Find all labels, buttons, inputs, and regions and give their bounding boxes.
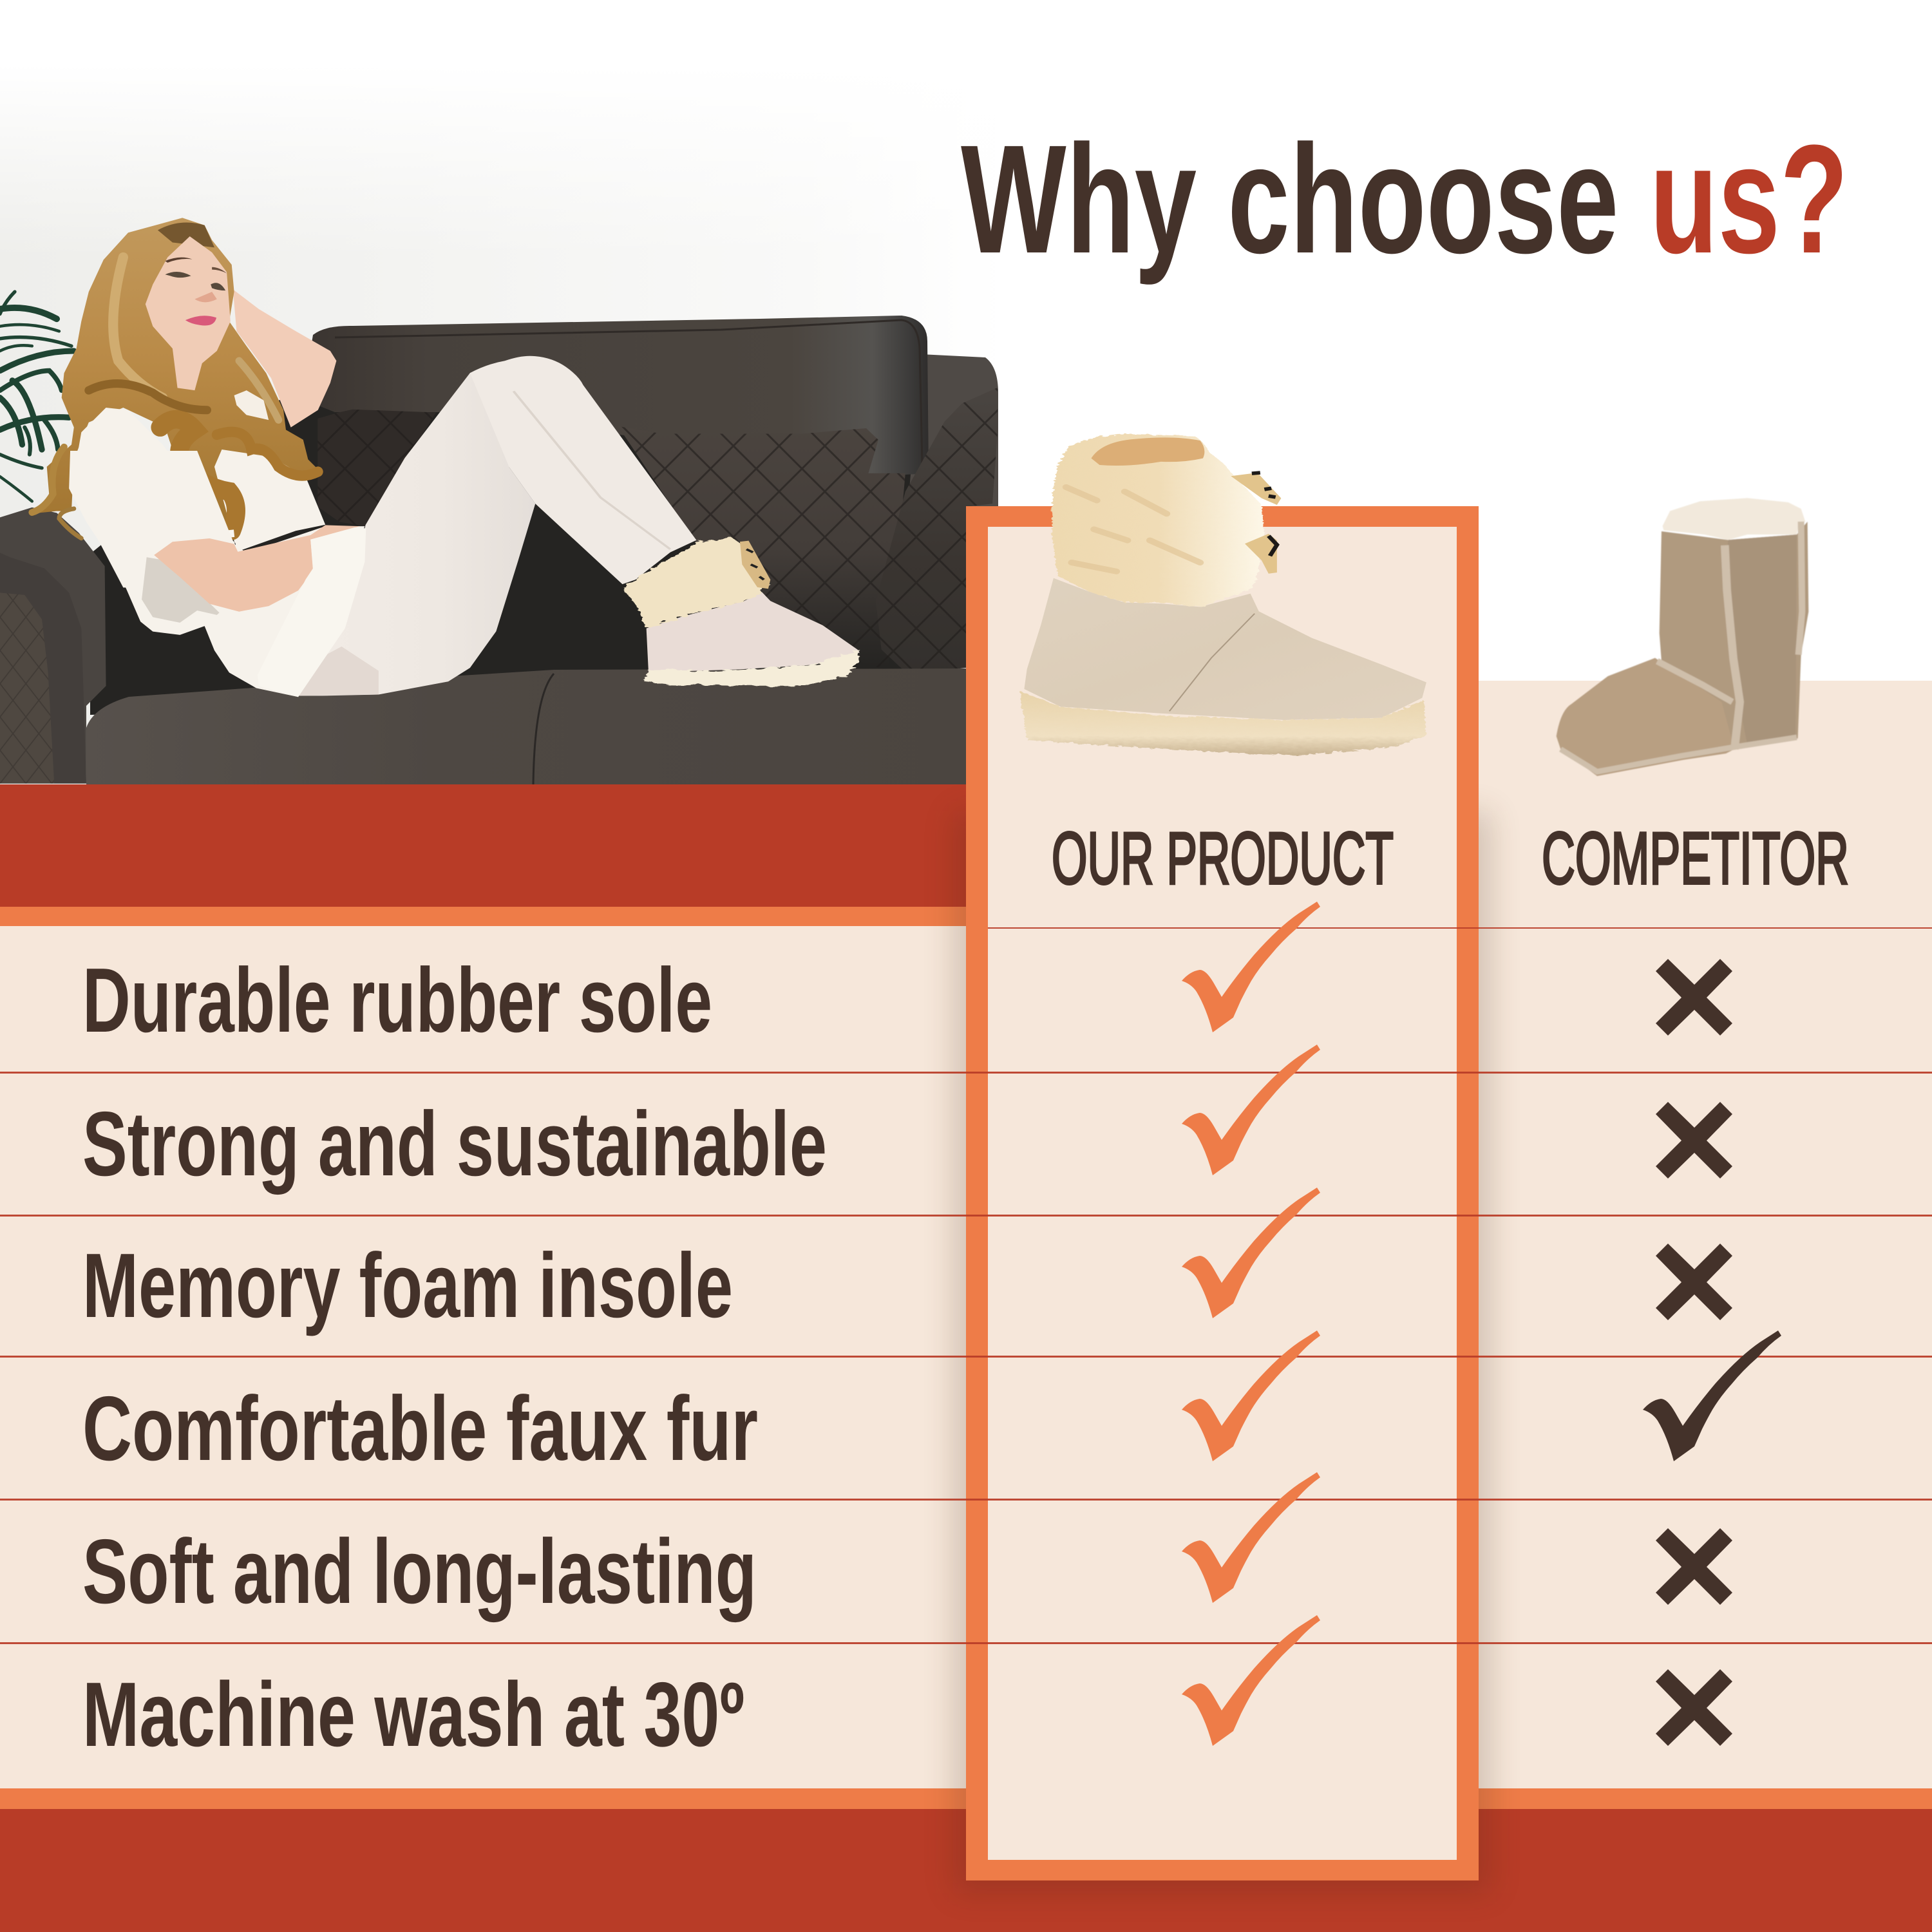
shirt lower [69,451,365,697]
seam [1170,614,1255,711]
peach table background left [0,926,966,1788]
boot body [1024,578,1426,720]
title: Why choose us? [961,113,1848,285]
shirt shoulder piece [234,390,269,420]
feature: soft and long-lasting: Soft and long-lasting [82,1520,757,1623]
raised arm [233,289,336,428]
back cushion piping [335,320,922,464]
right armrest [902,354,998,580]
right pillow [876,388,998,674]
left armrest [0,507,106,784]
face details [165,258,227,326]
trouser side seam [513,391,670,549]
feature: comfortable faux fur: Comfortable faux fur [82,1378,758,1480]
boot on foot [622,537,860,686]
face and neck [146,236,231,390]
product image: our boot [1020,434,1426,755]
hair curls [32,258,318,538]
feature: strong and sustainable: Strong and sustainable [82,1093,827,1195]
icons: competitor marks [1643,959,1781,1746]
left pillow [317,410,436,526]
plant [0,292,74,501]
orange header strip [0,907,966,926]
wall background [0,0,1005,784]
fleece rim [1663,498,1805,540]
trousers upper leg [296,363,535,696]
stitching [1560,522,1802,772]
shirt flap [258,527,366,697]
fur sole [1020,691,1426,755]
boot opening [1091,437,1204,466]
fur cuff [1052,434,1264,607]
hair mass [32,218,321,536]
back cushion [303,316,929,477]
center pillow [618,426,905,671]
toggles [1231,473,1281,574]
feature: durable rubber sole: Durable rubber sole [82,949,712,1052]
red header band [0,784,966,907]
sleeve lace [140,514,234,543]
peach table background right [1479,681,1932,1788]
red footer band [0,1809,1932,1932]
shirt upper [71,408,325,587]
trousers lower leg [470,356,696,584]
woman [32,218,696,697]
hair crown shadow [158,222,214,247]
orange footer strip [0,1788,1932,1809]
sofa back and seat [90,316,998,715]
seat cushion [86,668,966,784]
panel: our product column [966,506,1479,1880]
row divider lines [0,927,1932,1644]
seat seam [533,674,554,784]
feature: memory foam insole: Memory foam insole [82,1235,733,1337]
fur streaks [1066,487,1200,571]
product image: competitor boot [1557,498,1808,776]
panel shadow [953,811,1492,1893]
photo: woman resting on sofa wearing boots [0,0,1005,784]
dark cavity [90,386,914,715]
column heading: our product: OUR PRODUCT [1052,818,1394,900]
inner sleeve [142,557,220,623]
boot shaft [1660,522,1808,752]
forearm [154,525,360,612]
shaft right side [1726,535,1797,745]
icons: our product check marks [1182,902,1320,1746]
feature: machine wash at 30: Machine wash at 30º [82,1663,744,1766]
pocket [296,647,379,696]
boot foot [1557,658,1734,776]
